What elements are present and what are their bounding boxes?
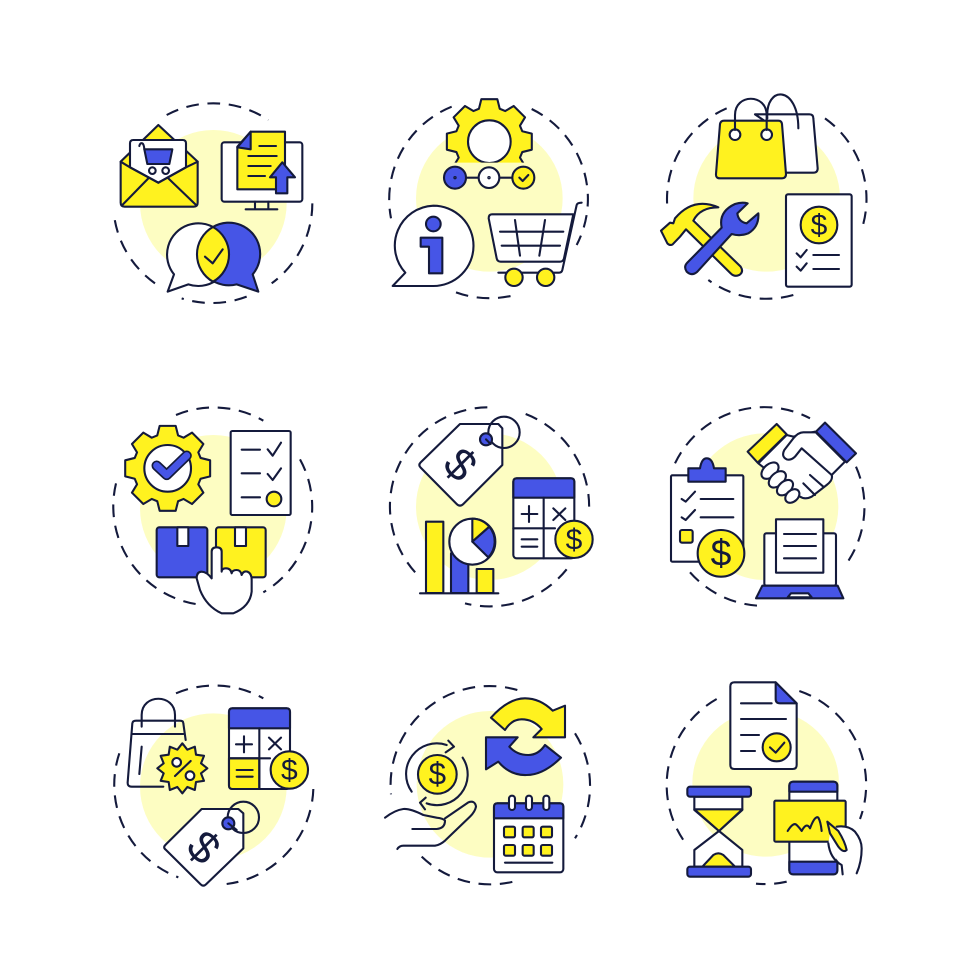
icon: invoice (786, 194, 852, 287)
panel: process, info and cart (389, 99, 588, 298)
icon: clipboard with coin (671, 458, 744, 577)
icon: handshake (748, 423, 856, 506)
icon: checklist (231, 431, 291, 515)
icon: approved document (730, 682, 797, 769)
icon: pointing hand (197, 547, 252, 613)
icon: calculator with coin (229, 708, 308, 789)
bar chart (420, 522, 498, 593)
icon: refresh arrows (486, 698, 565, 775)
icon: envelope with cart (121, 125, 198, 207)
panel: document, hourglass and e-signature (667, 682, 866, 884)
pie chart (449, 519, 495, 565)
icon: shopping bags (716, 94, 818, 178)
icon: price tag (164, 802, 259, 886)
panel: refresh, money cycle and calendar (385, 686, 590, 884)
icon: packages (157, 527, 266, 577)
icon: invoice: $ (811, 209, 828, 242)
icon set grid (112, 93, 868, 887)
panel: gear, checklist and packages (113, 407, 312, 613)
icon: hourglass (687, 787, 751, 877)
icon: price tag: $ (434, 438, 487, 491)
icon: overlapping speech bubbles (167, 223, 260, 292)
icon: calculator with coin: $ (566, 523, 583, 556)
icon: coin cycle over hand (385, 741, 476, 849)
icon: calculator with coin (513, 478, 593, 558)
icon: laptop with document (756, 519, 843, 598)
icon: clipboard with coin: $ (711, 532, 732, 574)
icon: shopping bag with discount badge (128, 699, 207, 793)
icon: phone with signature (774, 782, 846, 874)
panel: email, upload and agreement (114, 103, 312, 303)
icon: info speech bubble (393, 206, 473, 286)
icon: price tag: $ (177, 820, 231, 874)
icon: monitor with document upload (222, 132, 302, 209)
icon: hammer and wrench (661, 203, 758, 276)
panel: discount, calculator and price tag (114, 686, 313, 886)
panel: contract, handshake and laptop (671, 407, 864, 606)
icon: coin cycle over hand: $ (429, 757, 446, 792)
panel: bags, tools and invoice (661, 94, 866, 299)
icon: hand holding pen (827, 822, 862, 874)
icon: price tag (419, 417, 520, 506)
icon: calculator with coin: $ (281, 754, 298, 787)
icon: calendar (494, 796, 563, 872)
icon: gear with process steps (444, 99, 534, 189)
panel: price tag, calculator and charts (390, 407, 593, 606)
icon: shopping cart (489, 203, 582, 286)
icon: gear with check (125, 426, 210, 511)
